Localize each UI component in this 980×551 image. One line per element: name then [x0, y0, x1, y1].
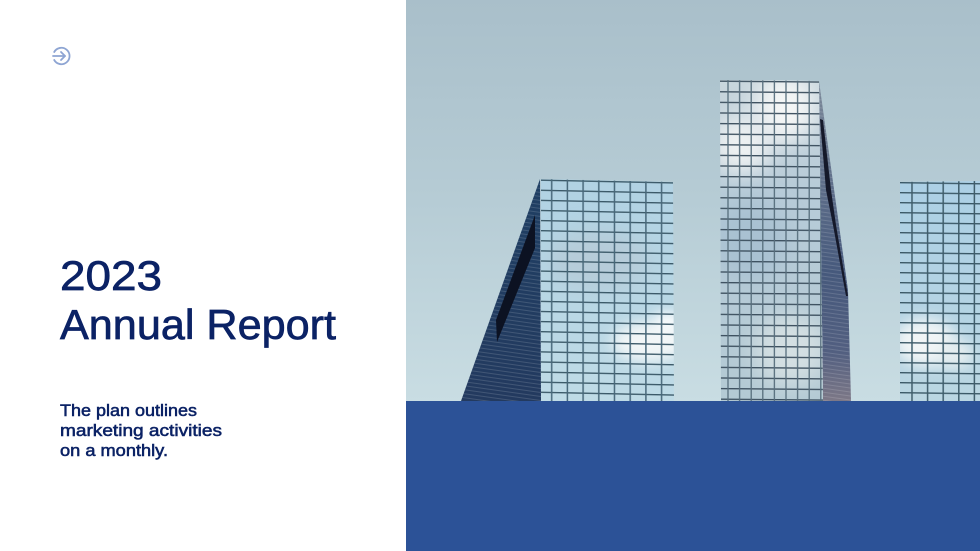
building: left tower — [461, 179, 688, 401]
building: right tower — [895, 181, 980, 401]
building: centre tower — [712, 74, 851, 401]
panel: skyline photo — [406, 0, 980, 402]
text block: description: marketing activities — [60, 421, 222, 440]
text block: description: The plan outlines — [60, 401, 197, 420]
title: 2023 — [60, 252, 162, 299]
panel: blue band — [406, 401, 980, 551]
title: Annual Report — [60, 301, 336, 348]
title — [60, 252, 336, 348]
text block: description: on a monthly. — [60, 441, 168, 460]
icon: circled arrow — [53, 48, 70, 64]
text block: description — [60, 401, 222, 460]
sky background — [406, 0, 980, 402]
